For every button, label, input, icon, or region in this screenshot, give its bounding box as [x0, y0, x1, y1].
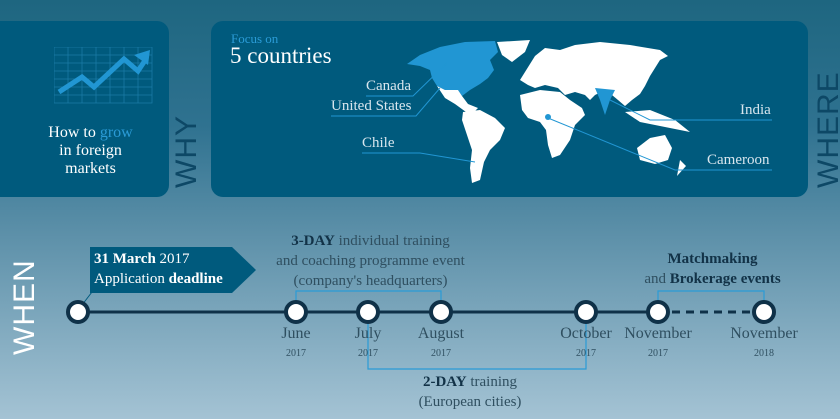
map: eurasia — [520, 42, 668, 106]
deadline text: 31 March 2017 — [94, 251, 190, 267]
text: 2-day: (European cities) — [419, 394, 521, 410]
panel: why — [0, 21, 169, 197]
text: matchmaking — [644, 251, 781, 287]
text: matchmaking: Matchmaking — [668, 251, 758, 267]
map labels: Canada — [366, 78, 411, 94]
text: India — [740, 102, 771, 118]
text: focus heading: Focus on — [231, 31, 278, 46]
month labels: October — [560, 325, 612, 342]
month labels: 2017 — [431, 348, 451, 359]
panel: where: 5 countries — [230, 43, 332, 68]
timeline nodes — [68, 302, 774, 322]
text: 3-day: (company's headquarters) — [294, 273, 447, 289]
month labels: 2018 — [754, 348, 774, 359]
label: WHY: WHY — [170, 115, 203, 188]
brackets — [296, 291, 764, 369]
text: how to grow — [48, 124, 133, 177]
text: United States — [331, 98, 411, 114]
text: how to grow: in foreign — [59, 142, 122, 159]
deadline text — [94, 251, 223, 287]
text: how to grow: markets — [65, 160, 116, 177]
label: WHEN: WHEN — [8, 259, 41, 355]
text: how to grow: How to grow — [48, 124, 133, 141]
panel: where — [211, 21, 808, 197]
icon: growth chart — [54, 47, 152, 104]
month labels: July — [355, 325, 381, 342]
map: central america and greenland — [437, 86, 478, 112]
month labels — [281, 325, 798, 359]
month labels: 2017 — [358, 348, 378, 359]
month labels: 2017 — [286, 348, 306, 359]
map: north america — [407, 41, 498, 96]
callout lines — [331, 63, 772, 170]
text: 3-day — [276, 233, 465, 289]
month labels: 2017 — [648, 348, 668, 359]
text: 3-day: and coaching programme event — [276, 253, 465, 269]
month labels: 2017 — [576, 348, 596, 359]
month labels: June — [281, 325, 311, 342]
map: south america — [462, 110, 505, 183]
month labels: November — [624, 325, 692, 342]
month labels: August — [418, 325, 464, 342]
text: 3-day: 3-DAY individual training — [291, 233, 450, 249]
text: Cameroon — [707, 152, 769, 168]
text: 2-day — [419, 374, 521, 410]
map: australia — [637, 135, 672, 164]
text: matchmaking: and Brokerage events — [644, 271, 781, 287]
text: Chile — [362, 135, 394, 151]
deadline text: Application deadline — [94, 271, 223, 287]
map: africa — [520, 90, 585, 158]
map: islands — [625, 110, 690, 132]
text: 2-day: 2-DAY training — [423, 374, 517, 390]
month labels: November — [730, 325, 798, 342]
callout: deadline — [82, 247, 256, 305]
